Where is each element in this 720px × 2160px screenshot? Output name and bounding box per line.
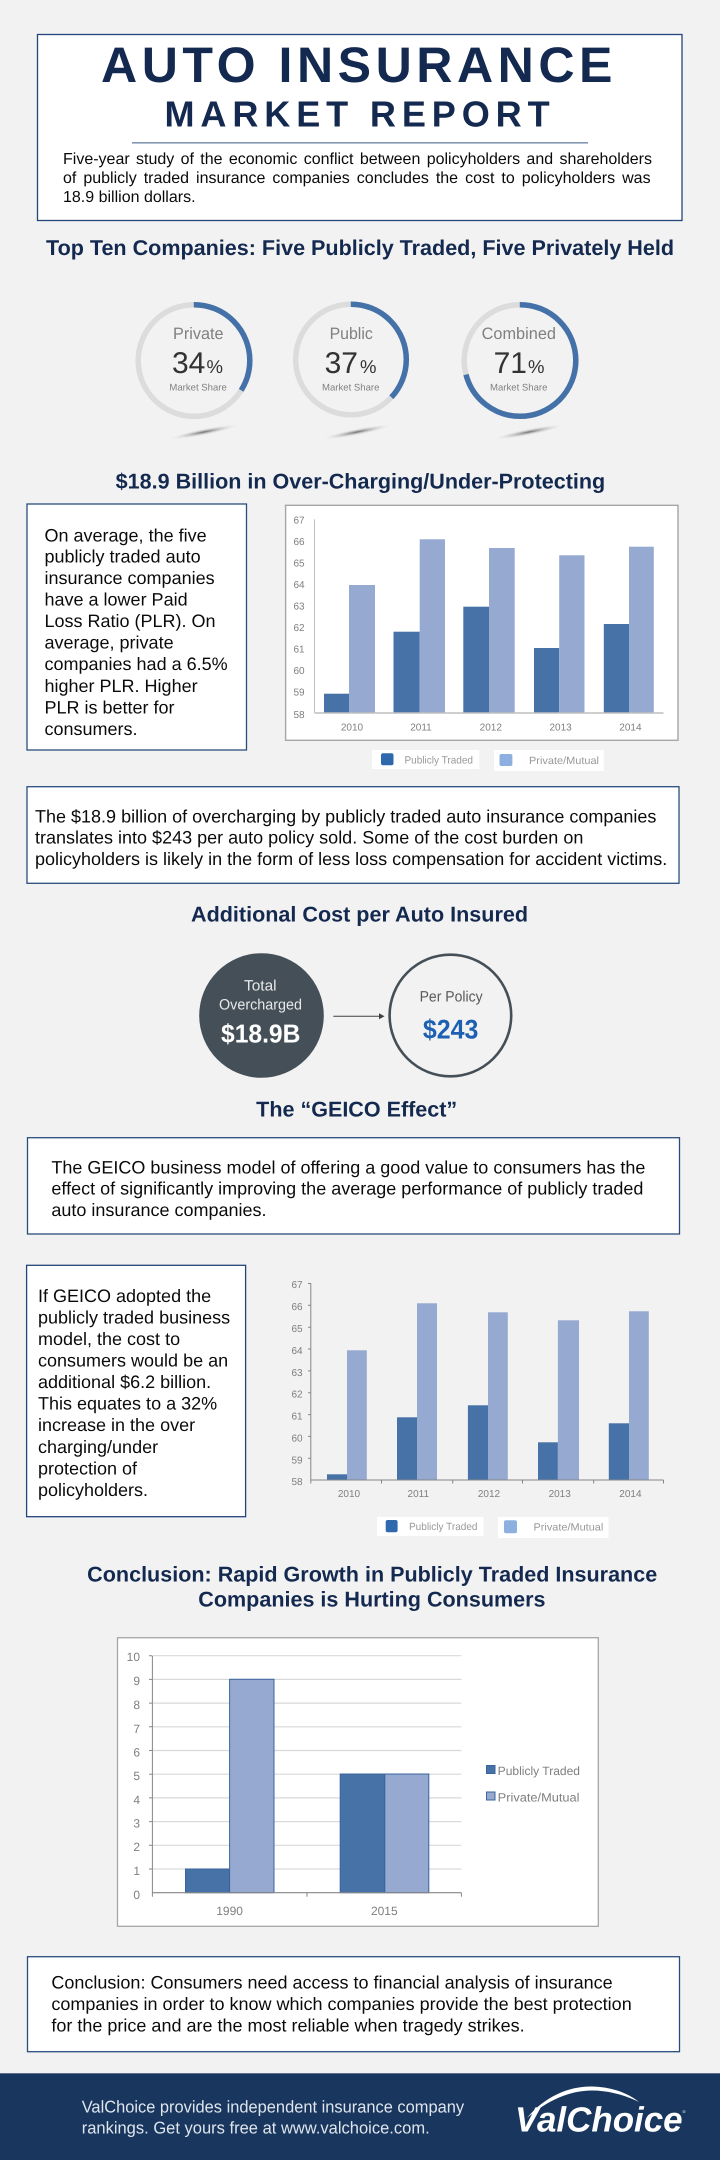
donut: private 34%: % xyxy=(206,356,223,377)
bar chart: company counts 1990 vs 2015: 2 xyxy=(133,1840,140,1854)
bar chart: paid loss ratio 2010-2014: 59 xyxy=(293,688,305,698)
heading: conclusion: Conclusion: Rapid Growth in Publicly Traded Insurance xyxy=(87,1563,657,1587)
bar chart: company counts 1990 vs 2015: 2015 xyxy=(371,1904,398,1918)
bar chart: paid loss ratio 2010-2014: 67 xyxy=(293,516,305,526)
bar chart: paid loss ratio without GEICO: 2014 xyxy=(619,1489,642,1500)
bar chart: company counts 1990 vs 2015 xyxy=(118,1638,598,1926)
panel: conclusion text: Conclusion: Consumers need access to financial analysis of insurance xyxy=(51,1972,613,1992)
circle: total overcharged: Total xyxy=(244,978,277,995)
bar chart: paid loss ratio without GEICO: 63 xyxy=(291,1368,303,1379)
panel: conclusion text xyxy=(28,1957,680,2052)
bar chart: paid loss ratio without GEICO: 65 xyxy=(291,1324,303,1335)
panel: GEICO hypothetical: policyholders. xyxy=(38,1480,148,1500)
panel: PLR explanation: have a lower Paid xyxy=(44,590,188,610)
bar chart: paid loss ratio 2010-2014: 66 xyxy=(293,537,305,548)
bar chart: paid loss ratio without GEICO: 64 xyxy=(291,1346,303,1357)
bar chart: paid loss ratio 2010-2014: 2012 xyxy=(480,723,502,734)
logo: ValChoice: ValChoice xyxy=(515,2100,683,2139)
bar chart: paid loss ratio 2010-2014 xyxy=(286,505,678,740)
panel: GEICO hypothetical: protection of xyxy=(38,1458,138,1478)
circle: total overcharged xyxy=(199,953,324,1078)
panel: GEICO hypothetical xyxy=(27,1265,246,1517)
intro text: 18.9 billion dollars. xyxy=(63,189,196,206)
bar chart: company counts 1990 vs 2015: 1 xyxy=(133,1864,140,1878)
panel: GEICO business model: effect of significantly improving the average performance of publicly traded xyxy=(51,1179,643,1199)
panel: PLR explanation: PLR is better for xyxy=(44,697,175,717)
panel: PLR explanation: insurance companies xyxy=(44,568,215,588)
panel: GEICO business model: The GEICO business model of offering a good value to consumers has the xyxy=(51,1157,645,1177)
bar chart: paid loss ratio 2010-2014: 2010 xyxy=(341,723,364,734)
bar chart: paid loss ratio 2010-2014: 2013 xyxy=(549,723,572,734)
bar chart: paid loss ratio 2010-2014: 2011 xyxy=(410,723,432,734)
footer band xyxy=(0,2073,720,2160)
donut: combined 71%: Combined xyxy=(482,325,556,343)
bar chart: paid loss ratio without GEICO: 66 xyxy=(291,1302,303,1313)
bar chart: paid loss ratio without GEICO: 67 xyxy=(291,1280,303,1291)
bar chart: company counts 1990 vs 2015: 3 xyxy=(133,1816,140,1830)
legend: third chart: Publicly Traded xyxy=(498,1764,580,1778)
bar chart: paid loss ratio without GEICO: 62 xyxy=(291,1390,303,1400)
heading: conclusion: Companies is Hurting Consumers xyxy=(198,1588,546,1612)
panel: overcharging text xyxy=(27,787,679,883)
footer text: ValChoice provides independent insurance company xyxy=(82,2098,465,2117)
panel: PLR explanation: consumers. xyxy=(44,719,138,739)
panel: overcharging text: translates into $243 per auto policy sold. Some of the cost burden on xyxy=(35,828,583,848)
donut: private 34%: 34 xyxy=(172,347,205,380)
intro text: Five-year study of the economic conflict between policyholders and shareholders xyxy=(63,151,652,168)
bar chart: paid loss ratio 2010-2014: 58 xyxy=(293,710,305,721)
bar chart: company counts 1990 vs 2015: 6 xyxy=(133,1746,140,1760)
legend: third chart: Private/Mutual xyxy=(498,1791,580,1805)
panel: PLR explanation: On average, the five xyxy=(44,525,207,545)
panel: overcharging text: policyholders is likely in the form of less loss compensation for accident victims. xyxy=(35,849,667,869)
panel: GEICO hypothetical: additional $6.2 billion. xyxy=(38,1372,211,1392)
panel: GEICO hypothetical: publicly traded business xyxy=(38,1307,230,1327)
donut: public 37%: 37 xyxy=(325,347,358,380)
panel: PLR explanation xyxy=(27,504,246,750)
subtitle: MARKET REPORT xyxy=(164,94,556,135)
donut: combined 71%: Market Share xyxy=(490,383,547,394)
panel: GEICO hypothetical: This equates to a 32% xyxy=(38,1393,217,1413)
logo: ValChoice: ® xyxy=(682,2109,686,2114)
panel: PLR explanation: average, private xyxy=(44,632,174,652)
legend: second chart xyxy=(377,1517,608,1538)
legend: second chart: Private/Mutual xyxy=(534,1522,603,1534)
panel: PLR explanation: Loss Ratio (PLR). On xyxy=(44,611,216,631)
footer text xyxy=(82,2098,465,2138)
panel: GEICO hypothetical: consumers would be an xyxy=(38,1350,228,1370)
heading: conclusion xyxy=(87,1563,657,1612)
heading: additional cost: Additional Cost per Auto Insured xyxy=(191,903,528,927)
panel: PLR explanation: publicly traded auto xyxy=(44,547,201,567)
panel: GEICO hypothetical: If GEICO adopted the xyxy=(38,1286,211,1306)
panel: conclusion text: for the price and are the most reliable when tragedy strikes. xyxy=(51,2016,525,2036)
circle: total overcharged: Overcharged xyxy=(219,996,302,1013)
bar chart: company counts 1990 vs 2015: 1990 xyxy=(216,1904,243,1918)
bar chart: paid loss ratio without GEICO: 61 xyxy=(291,1412,303,1422)
bar chart: paid loss ratio without GEICO: 2013 xyxy=(549,1489,571,1500)
donut: private 34%: Market Share xyxy=(169,383,227,394)
bar chart: paid loss ratio without GEICO: 2012 xyxy=(478,1489,501,1500)
bar chart: paid loss ratio 2010-2014: 64 xyxy=(293,580,305,591)
title: AUTO INSURANCE xyxy=(101,37,617,93)
bar chart: paid loss ratio 2010-2014: 65 xyxy=(293,558,305,570)
arrow xyxy=(333,1013,384,1019)
legend: first chart xyxy=(372,750,604,771)
bar chart: company counts 1990 vs 2015: 5 xyxy=(133,1769,140,1783)
donut: private 34% xyxy=(138,305,250,443)
heading: over-charging: $18.9 Billion in Over-Charging/Under-Protecting xyxy=(116,469,605,493)
donut: public 37% xyxy=(296,304,406,443)
circle: per policy xyxy=(390,955,511,1076)
bar chart: paid loss ratio without GEICO: 60 xyxy=(291,1434,303,1444)
circle: per policy: Per Policy xyxy=(420,989,483,1006)
panel: PLR explanation: companies had a 6.5% xyxy=(44,654,228,674)
legend: first chart: Private/Mutual xyxy=(529,755,599,767)
bar chart: paid loss ratio 2010-2014: 2014 xyxy=(619,723,642,734)
donut: combined 71% xyxy=(464,305,576,443)
donut: public 37%: % xyxy=(360,356,376,377)
panel: title xyxy=(38,34,682,220)
bar chart: paid loss ratio without GEICO: 59 xyxy=(291,1456,303,1466)
bar chart: paid loss ratio without GEICO: 58 xyxy=(291,1477,303,1488)
bar chart: company counts 1990 vs 2015: 9 xyxy=(133,1674,140,1688)
intro text xyxy=(63,151,652,206)
donut: public 37%: Market Share xyxy=(322,383,379,394)
panel: conclusion text: companies in order to know which companies provide the best protection xyxy=(51,1994,632,2014)
bar chart: paid loss ratio without GEICO: 2011 xyxy=(408,1489,429,1500)
bar chart: paid loss ratio 2010-2014: 62 xyxy=(293,623,305,634)
donut: private 34%: Private xyxy=(173,325,224,343)
circle: per policy: $243 xyxy=(423,1014,478,1044)
panel: GEICO business model xyxy=(28,1138,680,1234)
bar chart: company counts 1990 vs 2015: 7 xyxy=(133,1722,140,1736)
panel: GEICO hypothetical: increase in the over xyxy=(38,1415,195,1435)
bar chart: company counts 1990 vs 2015: 8 xyxy=(133,1698,140,1712)
legend: third chart xyxy=(486,1764,580,1805)
panel: GEICO business model: auto insurance companies. xyxy=(51,1200,267,1220)
panel: PLR explanation: higher PLR. Higher xyxy=(44,676,198,696)
intro text: of publicly traded insurance companies concludes the cost to policyholders was xyxy=(63,170,651,187)
bar chart: paid loss ratio without GEICO xyxy=(291,1280,664,1500)
panel: overcharging text: The $18.9 billion of overcharging by publicly traded auto insurance companies xyxy=(35,806,656,826)
bar chart: paid loss ratio 2010-2014: 63 xyxy=(293,602,305,612)
legend: second chart: Publicly Traded xyxy=(409,1521,478,1533)
bar chart: company counts 1990 vs 2015: 0 xyxy=(133,1888,140,1902)
panel: GEICO hypothetical: model, the cost to xyxy=(38,1329,180,1349)
donut: combined 71%: 71 xyxy=(494,347,527,380)
bar chart: company counts 1990 vs 2015: 4 xyxy=(133,1793,140,1807)
bar chart: company counts 1990 vs 2015: 10 xyxy=(127,1650,140,1664)
bar chart: paid loss ratio 2010-2014: 61 xyxy=(293,644,305,656)
panel: GEICO hypothetical: charging/under xyxy=(38,1437,158,1457)
circle: total overcharged: $18.9B xyxy=(221,1019,300,1049)
bar chart: paid loss ratio without GEICO: 2010 xyxy=(338,1489,361,1500)
bar chart: paid loss ratio 2010-2014: 60 xyxy=(293,666,305,677)
legend: first chart: Publicly Traded xyxy=(404,754,473,766)
footer text: rankings. Get yours free at www.valchoice.com. xyxy=(82,2119,430,2138)
donut: public 37%: Public xyxy=(330,325,373,343)
heading: top ten companies: Top Ten Companies: Five Publicly Traded, Five Privately Held xyxy=(46,236,674,260)
heading: GEICO effect: The “GEICO Effect” xyxy=(256,1098,457,1122)
donut: combined 71%: % xyxy=(528,356,544,377)
